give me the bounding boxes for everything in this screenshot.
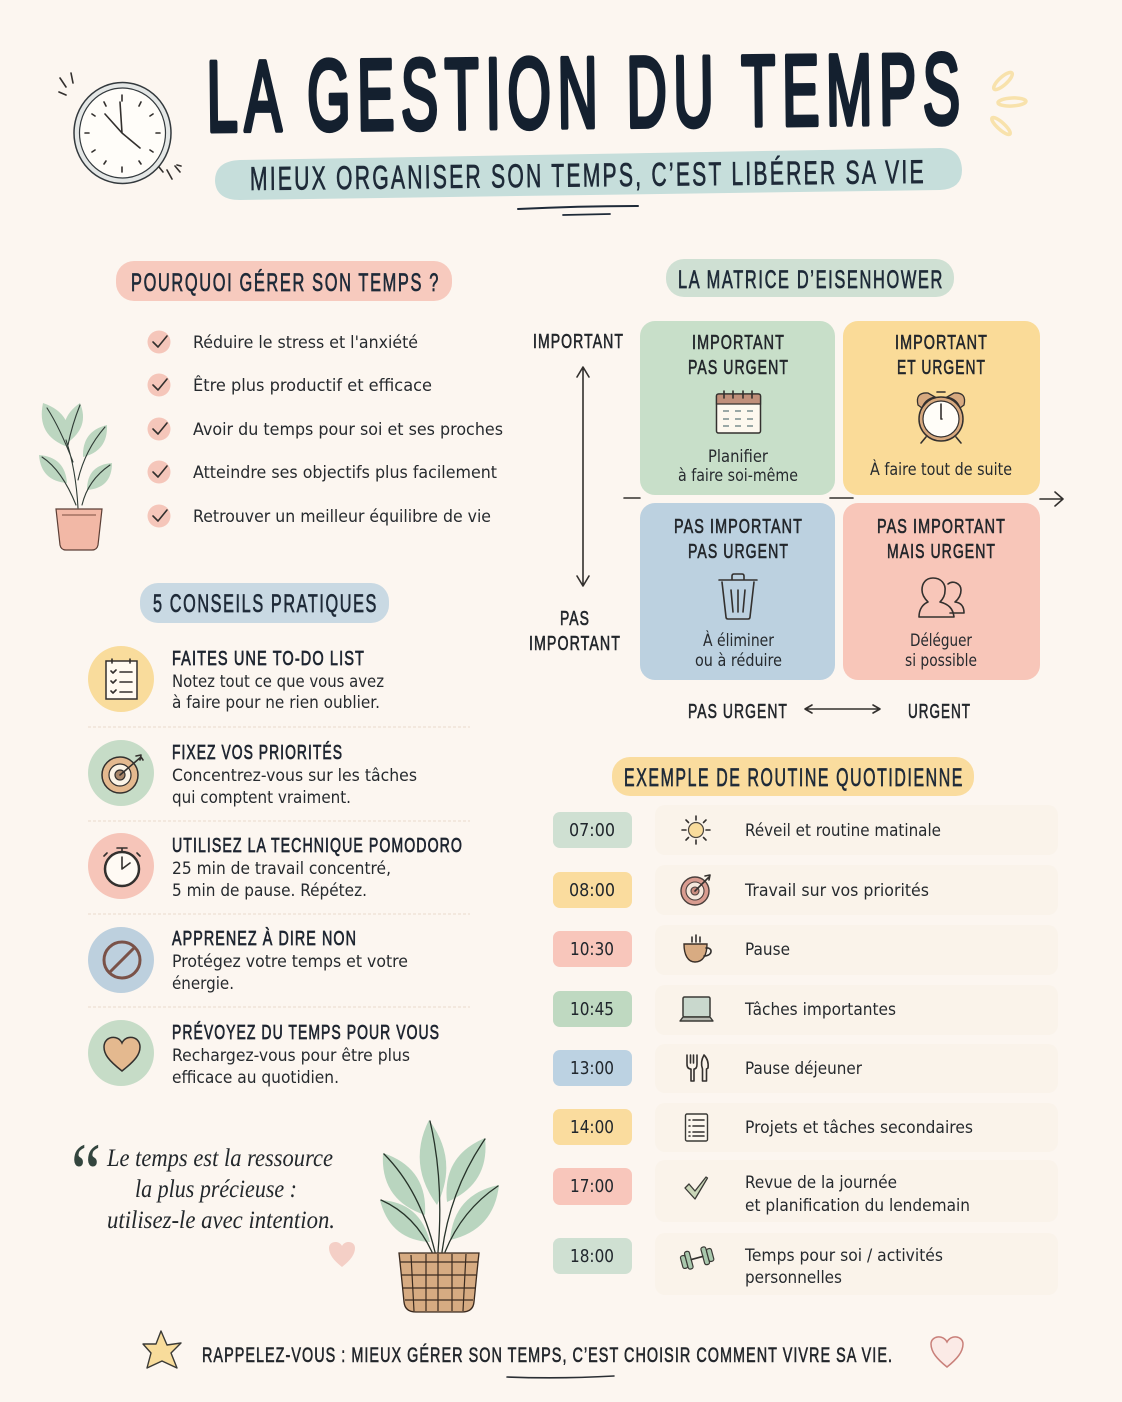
tip: priorities: [88, 740, 417, 808]
axis label: pas urgent: PAS URGENT: [688, 701, 788, 723]
axis label: important: IMPORTANT: [533, 331, 624, 353]
axis label: urgent: URGENT: [908, 701, 971, 723]
quadrant: important pas urgent: [640, 321, 835, 495]
tip: priorities: qui comptent vraiment.: [172, 788, 351, 808]
tip: time for you: efficace au quotidien.: [172, 1068, 339, 1088]
footer underline: [507, 1376, 614, 1378]
tip: pomodoro: 25 min de travail concentré,: [172, 859, 391, 879]
panel: benefits checklist: [148, 330, 503, 528]
quadrant: pas important mais urgent: PAS IMPORTANT: [877, 516, 1006, 538]
arrow: urgency axis: [805, 705, 880, 713]
arrow: horizontal matrix axis: [624, 492, 1063, 506]
quadrant: important pas urgent: PAS URGENT: [688, 357, 789, 379]
heading: pourquoi gérer son temps: POURQUOI GÉRER SON TEMPS ?: [131, 268, 440, 297]
tip: time for you: [88, 1020, 440, 1088]
tip: to-do list: Notez tout ce que vous avez: [172, 672, 384, 692]
row 18:00: Temps pour soi / activités: [744, 1246, 943, 1266]
quadrant: important pas urgent: IMPORTANT: [692, 332, 785, 354]
heading: 5 conseils pratiques: [140, 583, 389, 623]
icon: wall clock: [59, 73, 181, 184]
row 10:45: Tâches importantes: [744, 1000, 896, 1020]
quadrant: important et urgent: [843, 321, 1040, 495]
tip: to-do list: FAITES UNE TO-DO LIST: [172, 648, 365, 670]
tip: priorities: Concentrez-vous sur les tâches: [172, 766, 417, 786]
quadrant: pas important pas urgent: À éliminer: [703, 629, 774, 651]
quote: la plus précieuse :: [135, 1176, 297, 1203]
tip: time for you: Rechargez-vous pour être plus: [172, 1046, 410, 1066]
quadrant: important pas urgent: Planifier: [708, 447, 768, 467]
check item 5: Retrouver un meilleur équilibre de vie: [193, 507, 491, 527]
quote: “: [71, 1126, 101, 1220]
quote: [71, 1126, 335, 1234]
axis label: pas important: PAS: [560, 608, 590, 630]
row 18:00: personnelles: [745, 1268, 842, 1288]
tip: to-do list: à faire pour ne rien oublier.: [172, 693, 380, 713]
row 14:00: 14:00: [570, 1117, 614, 1138]
tip: priorities: FIXEZ VOS PRIORITÉS: [172, 741, 343, 764]
row 08:00: Travail sur vos priorités: [744, 881, 929, 901]
row 14:00: [553, 1103, 1058, 1152]
axis label: pas important: [529, 608, 621, 655]
quadrant: pas important mais urgent: si possible: [905, 651, 977, 671]
tip: to-do list: [88, 646, 384, 713]
check item 1: Réduire le stress et l'anxiété: [193, 333, 418, 353]
row 17:00: et planification du lendemain: [745, 1196, 970, 1216]
quadrant: pas important pas urgent: PAS URGENT: [688, 541, 789, 563]
row 17:00: 17:00: [570, 1176, 614, 1197]
row 18:00: [553, 1233, 1058, 1295]
axis label: pas important: IMPORTANT: [529, 633, 621, 655]
row 18:00: 18:00: [570, 1246, 614, 1267]
row 17:00: Revue de la journée: [745, 1173, 897, 1193]
tip: pomodoro: UTILISEZ LA TECHNIQUE POMODORO: [172, 835, 463, 857]
quadrant: important et urgent: ET URGENT: [897, 357, 986, 379]
row 07:00: Réveil et routine matinale: [745, 821, 941, 841]
tip: time for you: PRÉVOYEZ DU TEMPS POUR VOUS: [172, 1021, 440, 1044]
quadrant: important et urgent: IMPORTANT: [895, 332, 988, 354]
tip: say no: APPRENEZ À DIRE NON: [172, 927, 357, 950]
icon: small potted plant: [39, 403, 112, 550]
arrow: vertical importance axis: [577, 367, 589, 586]
row 17:00: [553, 1160, 1058, 1222]
quadrant: important et urgent: À faire tout de suite: [870, 458, 1012, 480]
tip: say no: Protégez votre temps et votre: [172, 952, 408, 972]
panel: daily routine: [553, 805, 1058, 1295]
row 10:45: 10:45: [570, 999, 614, 1020]
row 13:00: 13:00: [570, 1058, 614, 1079]
footer star: [143, 1331, 181, 1368]
tip: pomodoro: [88, 833, 463, 901]
check item 4: Atteindre ses objectifs plus facilement: [193, 463, 497, 483]
row 08:00: [553, 865, 1058, 915]
row 07:00: 07:00: [569, 820, 615, 841]
heading: matrice d'Eisenhower: [666, 259, 954, 297]
row 08:00: 08:00: [569, 880, 615, 901]
tip: say no: [88, 927, 408, 994]
icon: yellow sparkle marks: [990, 70, 1026, 137]
footer heart: [931, 1337, 963, 1367]
quadrant: pas important mais urgent: MAIS URGENT: [887, 541, 996, 563]
quadrant: pas important pas urgent: ou à réduire: [695, 651, 782, 671]
quadrant: important pas urgent: à faire soi-même: [678, 466, 798, 486]
tip: say no: énergie.: [172, 974, 234, 994]
heading: exemple de routine: [612, 757, 974, 796]
quote: utilisez-le avec intention.: [107, 1207, 335, 1234]
panel: tips list: [88, 646, 470, 1088]
quadrant: pas important mais urgent: Déléguer: [910, 631, 972, 651]
row 10:30: 10:30: [570, 939, 614, 960]
quote: Le temps est la ressource: [106, 1145, 333, 1172]
icon: plant in woven basket: [380, 1120, 499, 1312]
row 10:30: Pause: [745, 940, 790, 960]
row 10:45: [553, 985, 1058, 1035]
row 13:00: [553, 1044, 1058, 1093]
check item 2: Être plus productif et efficace: [193, 374, 432, 396]
check item 1: [148, 330, 418, 354]
check item 3: Avoir du temps pour soi et ses proches: [193, 420, 503, 440]
row 07:00: [553, 805, 1058, 855]
icon: pink heart: [329, 1242, 355, 1267]
tip: pomodoro: 5 min de pause. Répétez.: [172, 881, 367, 901]
heading: matrice d'Eisenhower: LA MATRICE D’EISENHOWER: [678, 266, 944, 294]
quadrant: pas important pas urgent: PAS IMPORTANT: [674, 516, 803, 538]
heading: pourquoi gérer son temps: [116, 261, 452, 301]
quadrant: pas important mais urgent: [843, 503, 1040, 680]
row 13:00: Pause déjeuner: [745, 1059, 862, 1079]
subtitle underline: [518, 206, 638, 215]
heading: 5 conseils pratiques: 5 CONSEILS PRATIQUES: [153, 590, 378, 618]
row 14:00: Projets et tâches secondaires: [745, 1118, 973, 1138]
row 10:30: [553, 925, 1058, 975]
quadrant: pas important pas urgent: [640, 503, 835, 680]
chart: Eisenhower matrix: [640, 321, 1040, 680]
